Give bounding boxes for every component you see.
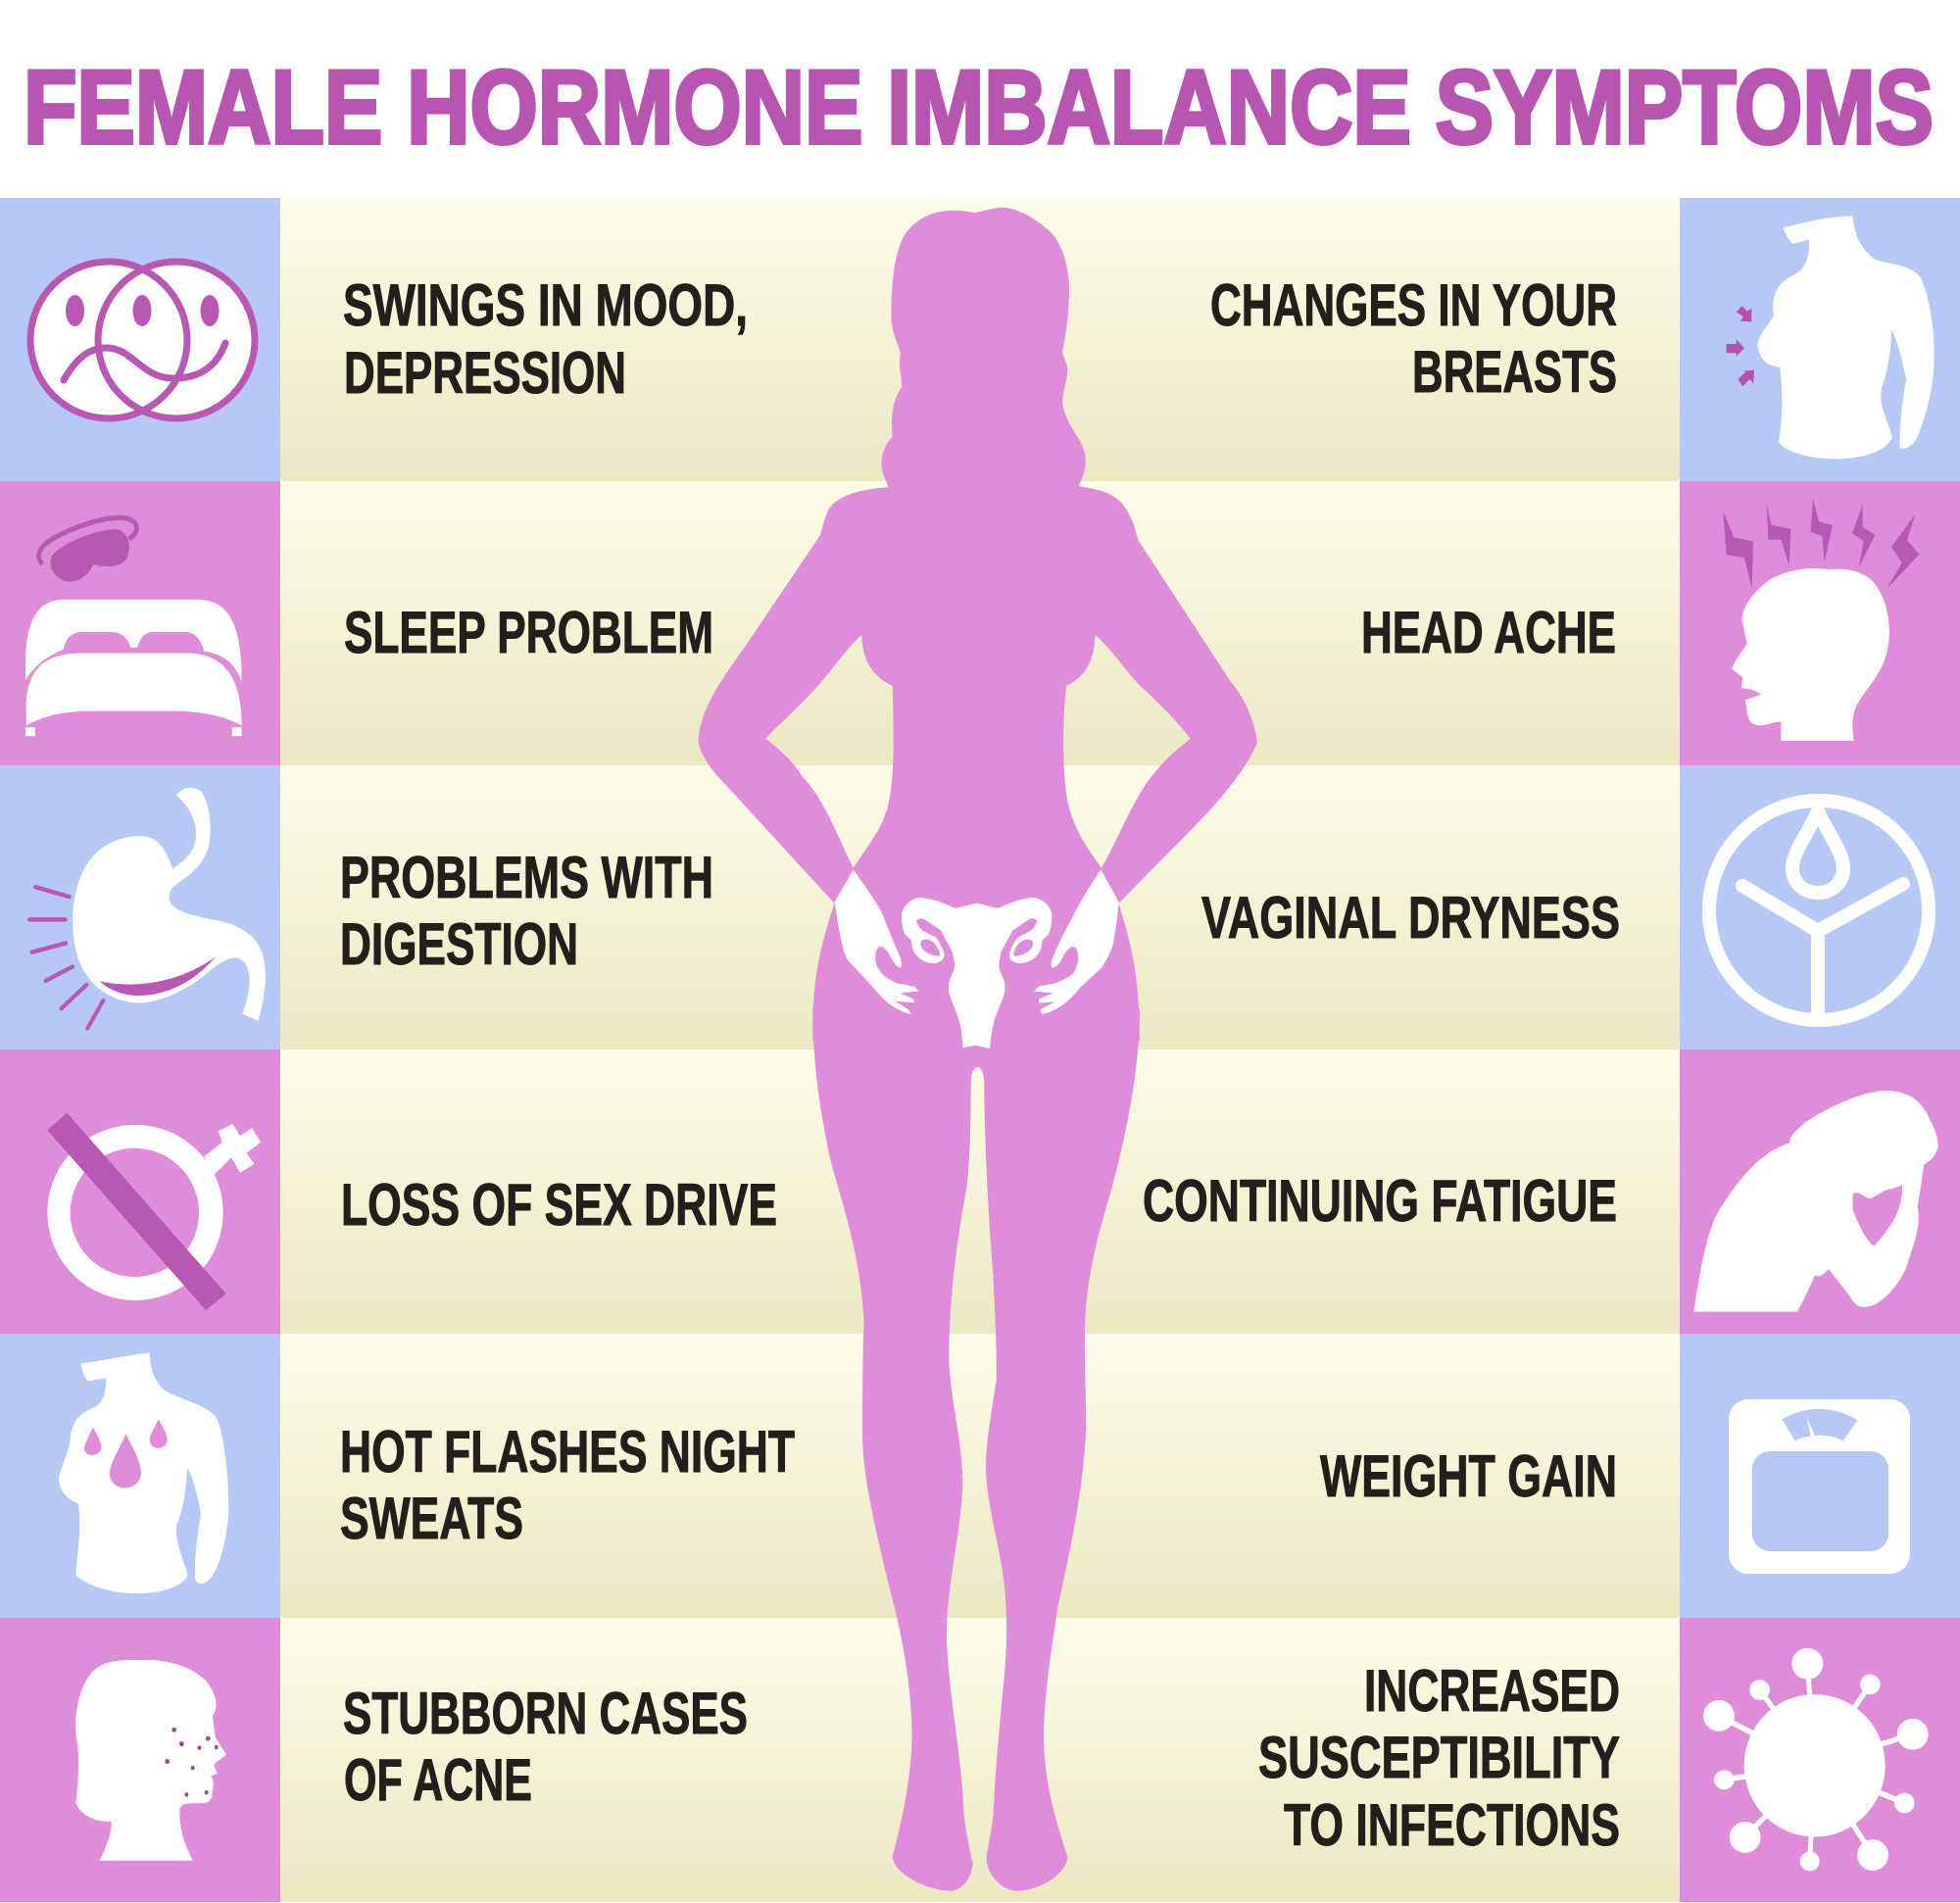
text: swings in mood: DEPRESSION — [344, 340, 626, 406]
icon: head with lightning bolts — [1723, 499, 1919, 741]
text: loss of sex drive: LOSS OF SEX DRIVE — [341, 1172, 777, 1238]
panel: fatigue icon — [1680, 1049, 1960, 1334]
text: hot flashes night sweats: HOT FLASHES NIGHT — [340, 1419, 795, 1485]
central female body silhouette — [699, 208, 1257, 1891]
upper body — [699, 208, 1257, 1042]
uterus — [902, 898, 1052, 1049]
text: sleep problem: SLEEP PROBLEM — [344, 600, 713, 665]
panel: sex drive icon — [0, 1049, 280, 1334]
icon: head profile with acne dots — [75, 1660, 226, 1861]
icon: two overlapping faces — [30, 262, 255, 418]
text: stubborn cases of acne — [343, 1681, 748, 1813]
text: changes in your breasts: BREASTS — [1412, 339, 1617, 405]
text: increased susceptibility to infections — [1258, 1658, 1620, 1858]
icon: crossed female symbol — [47, 1113, 261, 1310]
text: hot flashes night sweats: SWEATS — [340, 1486, 523, 1551]
text: stubborn cases of acne: OF ACNE — [344, 1747, 532, 1813]
text: hot flashes night sweats — [340, 1419, 795, 1551]
right hand — [1034, 869, 1119, 1014]
icon: tired person holding head — [1693, 1091, 1938, 1312]
text: changes in your breasts: CHANGES IN YOUR — [1210, 272, 1617, 338]
icon: sleep mask and bed — [25, 517, 242, 736]
text: vaginal dryness: VAGINAL DRYNESS — [1201, 885, 1620, 951]
text: problems with digestion: PROBLEMS WITH — [340, 845, 713, 910]
text: head ache: HEAD ACHE — [1361, 600, 1616, 665]
left hand — [835, 869, 918, 1014]
text: problems with digestion — [340, 845, 713, 977]
central cream rows background — [280, 198, 1680, 1902]
icon: torso with arrows — [1727, 216, 1935, 459]
text: increased susceptibility to infections: INCREASED — [1364, 1658, 1620, 1724]
text: continuing fatigue: CONTINUING FATIGUE — [1143, 1168, 1617, 1234]
panel: breast changes icon — [1680, 198, 1960, 481]
panel: weight gain icon — [1680, 1334, 1960, 1618]
text: stubborn cases of acne: STUBBORN CASES — [343, 1681, 748, 1746]
text: changes in your breasts — [1210, 272, 1617, 405]
panel: vaginal dryness icon — [1680, 765, 1960, 1049]
panel: digestion icon — [0, 765, 280, 1049]
text: swings in mood: SWINGS IN MOOD, — [343, 272, 748, 338]
text: weight gain: WEIGHT GAIN — [1320, 1443, 1617, 1509]
hands and uterus illustration — [835, 869, 1119, 1049]
icon: torso with sweat drops — [59, 1352, 228, 1593]
icon: virus — [1703, 1648, 1929, 1871]
panel: head ache icon — [1680, 481, 1960, 765]
panel: mood swings icon — [0, 198, 280, 481]
text: swings in mood — [343, 272, 748, 406]
icon: circle with drop and Y shape — [1709, 801, 1929, 1020]
text: increased susceptibility to infections: SUSCEPTIBILITY — [1258, 1725, 1620, 1790]
panel: sleep icon — [0, 481, 280, 765]
panel: infections icon — [1680, 1618, 1960, 1902]
legs — [812, 1009, 1140, 1891]
icon: weighing scale — [1729, 1399, 1910, 1574]
panel: hot flashes icon — [0, 1334, 280, 1618]
text: problems with digestion: DIGESTION — [340, 911, 578, 977]
panel: acne icon — [0, 1618, 280, 1902]
text: increased susceptibility to infections: TO INFECTIONS — [1284, 1792, 1620, 1858]
icon: stomach — [29, 788, 266, 1028]
